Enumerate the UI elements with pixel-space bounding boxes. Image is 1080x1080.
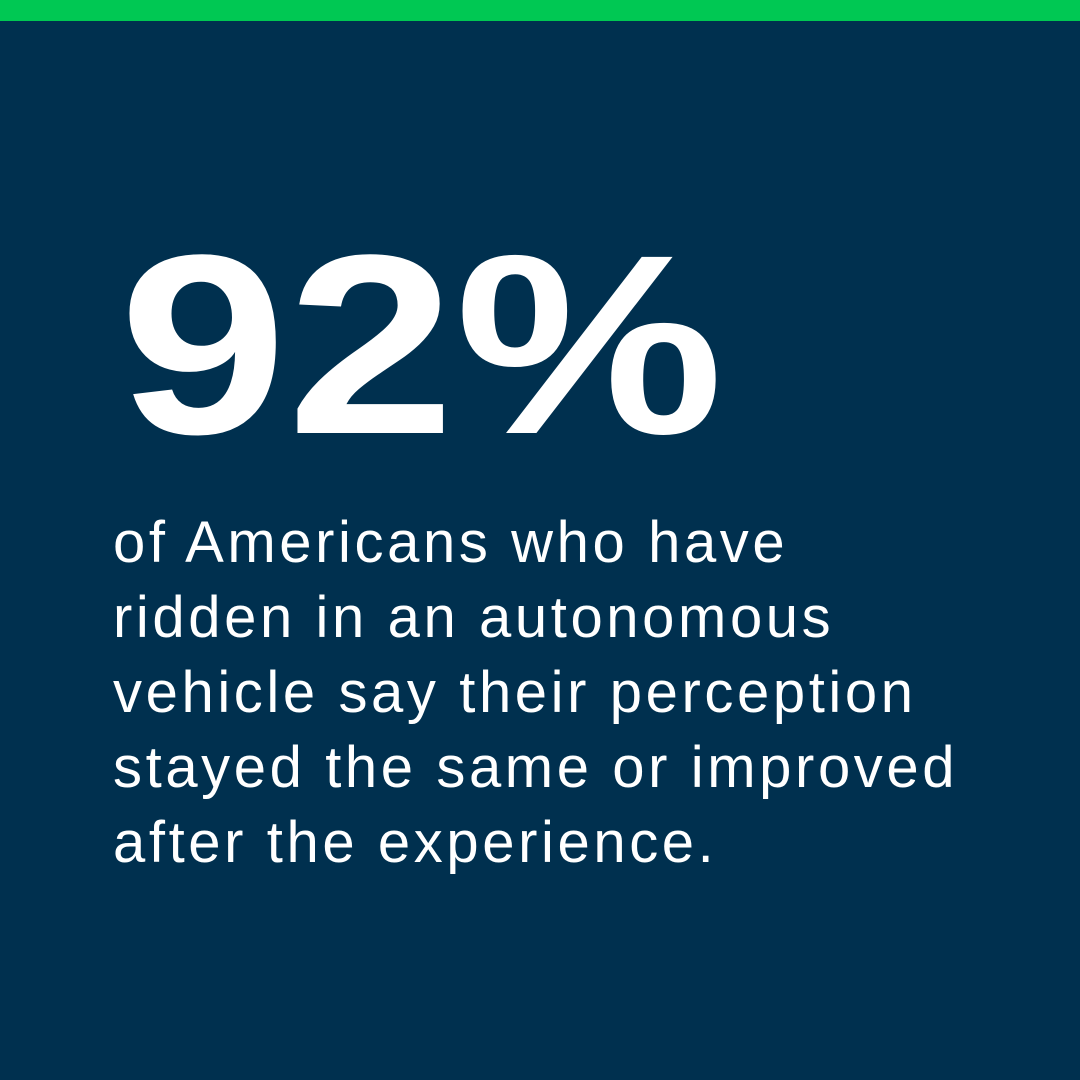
description text: after the experience. bbox=[113, 810, 717, 875]
description text: ridden in an autonomous bbox=[113, 585, 834, 650]
description text: stayed the same or improved bbox=[113, 735, 958, 800]
description text: of Americans who have bbox=[113, 510, 788, 575]
description text: vehicle say their perception bbox=[113, 660, 917, 725]
top accent bar bbox=[0, 0, 1080, 21]
headline statistic: 92% bbox=[119, 202, 724, 488]
description text bbox=[113, 510, 958, 875]
